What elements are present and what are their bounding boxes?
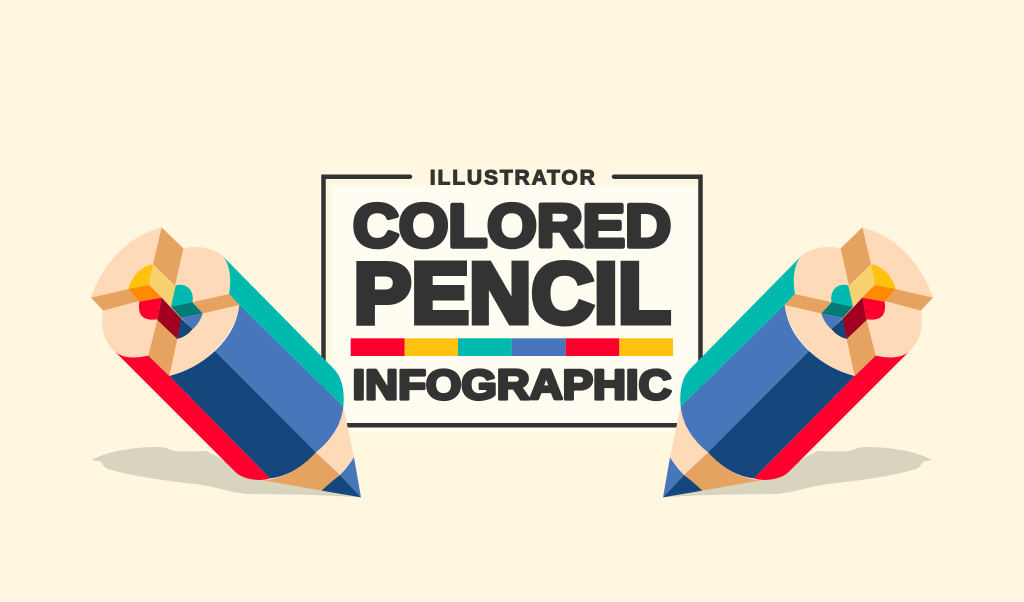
shadow (663, 447, 932, 497)
tip dark blue (663, 475, 702, 497)
wood cross bands (91, 227, 239, 376)
teal side (223, 257, 344, 407)
shadow (92, 447, 361, 497)
red side (115, 352, 270, 480)
tip light blue (663, 457, 684, 497)
light blue side (681, 305, 809, 452)
teal side (680, 257, 801, 407)
wood end (91, 227, 239, 376)
wood cone tan (262, 452, 340, 491)
wood cone tan (684, 452, 762, 491)
heading: PENCIL: PENCIL (354, 247, 671, 342)
tip dark blue (322, 475, 361, 497)
panel: title card (332, 185, 697, 433)
dark blue side (169, 351, 316, 478)
wood cross bands (785, 227, 933, 376)
heading: INFOGRAPHIC: INFOGRAPHIC (352, 361, 672, 408)
red side (754, 352, 909, 480)
wood cone peach (670, 407, 708, 475)
heading: ILLUSTRATOR: ILLUSTRATOR (430, 166, 595, 189)
right pencil with shadow (663, 227, 933, 497)
wood cone peach (316, 407, 354, 475)
color bar (351, 338, 673, 356)
lead core (128, 264, 203, 339)
wood end (785, 227, 933, 376)
dark blue side (708, 351, 855, 478)
heading: COLORED: COLORED (353, 192, 671, 260)
frame around title (324, 177, 700, 425)
left pencil with shadow (91, 227, 361, 497)
light blue side (215, 305, 343, 452)
lead core (821, 264, 896, 339)
tip light blue (340, 457, 361, 497)
